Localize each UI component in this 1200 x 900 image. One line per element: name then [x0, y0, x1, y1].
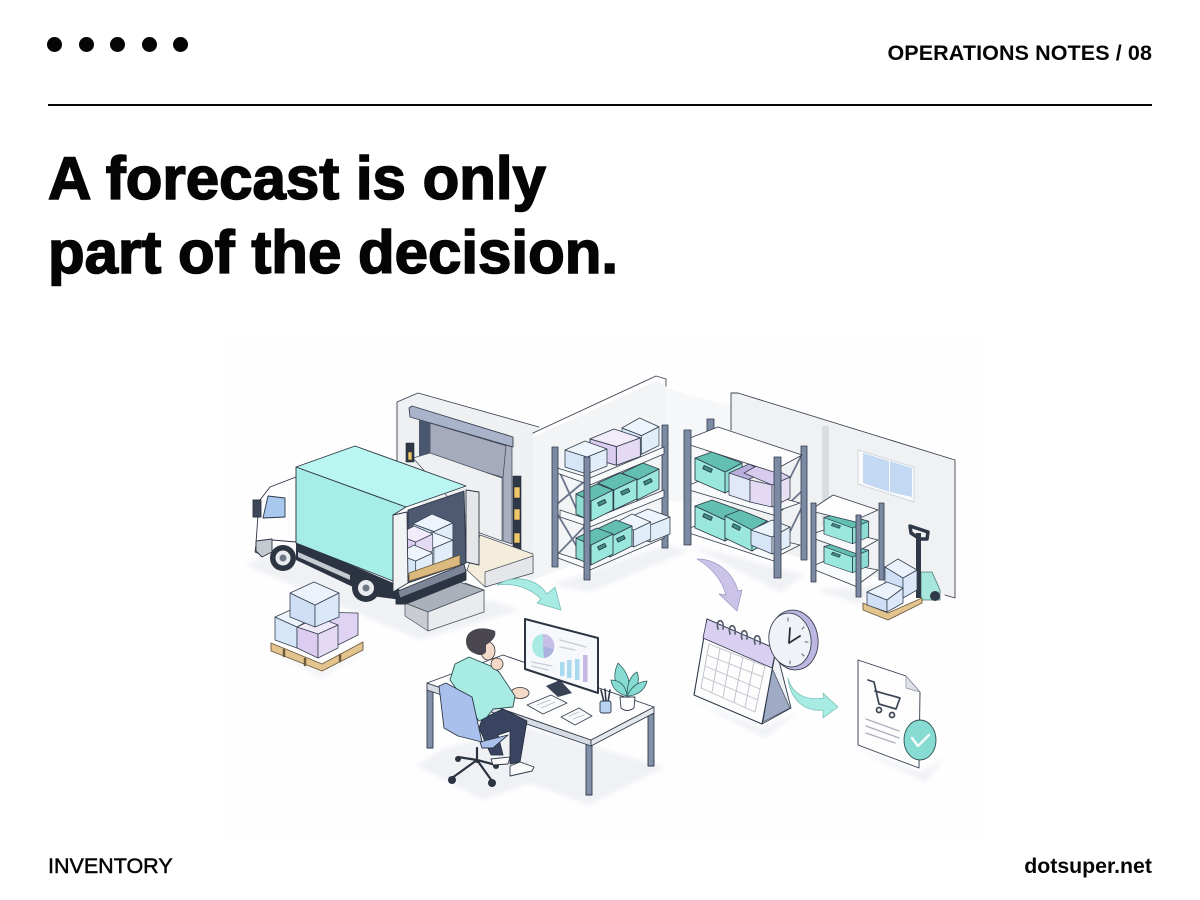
- footer category: INVENTORY: [48, 854, 173, 878]
- rings: [717, 621, 760, 644]
- five header dots: [47, 37, 188, 52]
- chair base: [448, 748, 499, 787]
- shelf unit left: [552, 418, 670, 580]
- open door: [393, 512, 408, 592]
- desk legs: [427, 690, 654, 795]
- shelf unit small: [811, 495, 884, 597]
- dock platform and steps: [405, 535, 533, 631]
- plant: [611, 663, 647, 710]
- dock bumpers: [406, 443, 521, 551]
- arrow: teal calendar to order: [788, 678, 838, 718]
- pie chart: [532, 634, 554, 658]
- head: [481, 642, 495, 660]
- pen cup: [600, 689, 611, 713]
- cart icon: [868, 680, 900, 718]
- arrow: teal dock to desk: [497, 579, 561, 610]
- title: A forecast is only: [48, 145, 546, 212]
- cargo box: [296, 446, 479, 604]
- legs: [479, 709, 527, 764]
- desk workstation: [427, 619, 654, 795]
- papers: [527, 695, 592, 725]
- desk top: [427, 655, 654, 746]
- working hand: [511, 688, 529, 698]
- shelf unit middle: [684, 419, 807, 578]
- chair seat and backrest: [439, 683, 508, 748]
- arrow: lilac shelf to calendar: [697, 559, 742, 611]
- shoes: [491, 757, 510, 765]
- date grid: [701, 644, 765, 712]
- clock: [765, 607, 822, 673]
- torso and arm: [450, 657, 515, 721]
- faint illustration backdrop: [222, 340, 985, 840]
- cab: [253, 477, 296, 557]
- title: part of the decision.: [48, 219, 618, 286]
- header label: OPERATIONS NOTES / 08: [887, 41, 1152, 65]
- pallet of boxes by truck: [271, 582, 363, 671]
- person: [450, 628, 534, 776]
- bars: [560, 655, 588, 682]
- check badge: [904, 720, 936, 760]
- chin hand: [491, 658, 503, 670]
- title: [48, 145, 618, 286]
- walls: [397, 376, 955, 598]
- pallet jack with boxes: [863, 526, 940, 620]
- wheels: [270, 545, 380, 602]
- footer site: dotsuper.net: [1024, 854, 1152, 878]
- calendar: [694, 619, 791, 724]
- chassis: [296, 541, 402, 600]
- monitor: [525, 619, 598, 697]
- loading dock door: [406, 406, 521, 551]
- floor shadows: [245, 545, 945, 805]
- header rule: [48, 104, 1152, 106]
- truck: [253, 446, 479, 604]
- order document: [858, 660, 936, 768]
- truck load: [397, 514, 460, 581]
- window: [858, 450, 914, 502]
